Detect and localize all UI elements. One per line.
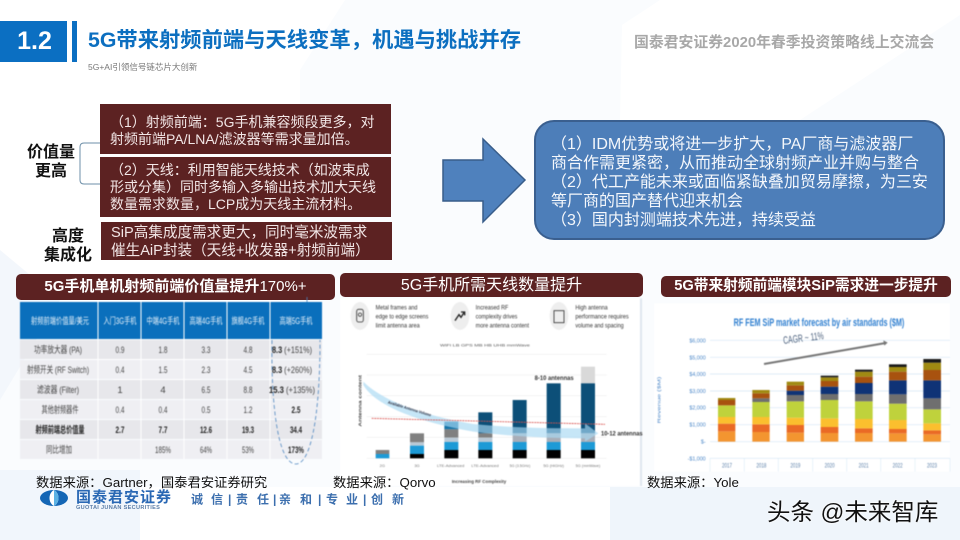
text box: RF front end: 射频前端PA/LNA/滤波器等需求量加倍。 — [110, 131, 359, 147]
SiP chart: 2017 — [722, 463, 732, 470]
table heading — [16, 274, 335, 300]
SiP chart: $6,000 — [689, 338, 706, 344]
text box: SiP: SiP高集成度需求更大，同时毫米波需求 — [111, 225, 367, 241]
antenna chart: more antenna content — [476, 323, 529, 330]
antenna chart: limit antenna area — [376, 323, 420, 330]
value table: 滤波器 (Filter) — [37, 384, 79, 396]
text box: antenna: 形或分集）同时多输入多输出技术加大天线 — [110, 179, 376, 195]
value table: 高端5G手机 — [280, 315, 312, 326]
value table: 8.3 (+151%) — [272, 345, 312, 356]
value table: 34.4 — [290, 425, 302, 436]
text box: RF front end: （1）射频前端：5G手机兼容频段更多，对 — [110, 114, 374, 130]
label: high integration: 高度 — [52, 228, 84, 245]
antenna chart: edge to edge screens — [376, 314, 428, 321]
value table: 4.5 — [244, 365, 252, 376]
label: high integration — [44, 227, 92, 264]
SiP chart: 2018 — [756, 463, 767, 470]
SiP chart: $3,000 — [689, 389, 706, 395]
antenna chart: Increasing RF Complexity — [452, 479, 507, 484]
value table: 4 — [160, 385, 166, 396]
label: value up — [27, 143, 75, 180]
SiP chart: Revenue ($M) — [656, 376, 661, 423]
value table: 0.5 — [202, 405, 210, 416]
value table: 173% — [288, 445, 304, 456]
SiP chart: 2022 — [893, 463, 903, 470]
slogan: 诚信|责任|亲和|专业|创新 — [191, 492, 404, 506]
value table: 2.7 — [116, 425, 124, 436]
conclusion box: 等厂商的国产替代迎来机会 — [551, 193, 743, 210]
watermark: 头条 @未来智库 — [767, 499, 938, 525]
value table: 射频开关 (RF Switch) — [27, 364, 89, 376]
conclusion box — [534, 120, 945, 240]
title: 5G带来射频前端与天线变革，机遇与挑战并存 — [88, 28, 521, 52]
subtitle: 5G+AI引领信号链芯片大创新 — [88, 62, 197, 72]
antenna chart: 10-12 antennas — [601, 430, 643, 437]
value table: 19.3 — [242, 425, 254, 436]
text box: RF front end — [100, 104, 391, 154]
SiP chart: 2021 — [859, 463, 869, 470]
antenna chart: LTE-Advanced — [437, 463, 464, 468]
SiP chart heading: 5G带来射频前端模块SiP需求进一步提升 — [674, 278, 938, 294]
antenna chart: High antenna — [575, 305, 608, 312]
value table: 0.4 — [158, 405, 168, 416]
value table: 53% — [242, 445, 254, 456]
source: Gartner: 数据来源：Gartner，国泰君安证券研究 — [36, 475, 267, 490]
antenna chart: 5G (HiGHz) — [543, 463, 565, 468]
table heading: 5G手机单机射频前端价值量提升170%+ — [44, 278, 307, 295]
antenna chart: 5G (3.5GHz) — [510, 463, 531, 468]
conclusion box: （2）代工产能未来或面临紧缺叠加贸易摩擦，为三安 — [551, 174, 928, 191]
antenna chart: 5G (mmWave) — [576, 463, 601, 468]
value table: 6.5 — [202, 385, 210, 396]
value table: 2.5 — [292, 405, 301, 416]
value table: 0.9 — [116, 345, 124, 356]
value table: 1 — [117, 385, 123, 396]
conclusion box: 商合作需更紧密，从而推动全球射频产业并购与整合 — [551, 155, 919, 172]
text box: SiP — [101, 222, 392, 260]
logo english name: GUOTAI JUNAN SECURITIES — [76, 504, 160, 510]
label: value up: 价值量 — [27, 144, 75, 161]
conclusion box: （3）国内封测端技术先进，持续受益 — [551, 212, 816, 229]
SiP chart: 2020 — [825, 463, 835, 470]
antenna chart heading — [340, 273, 643, 297]
header accent bar — [72, 21, 77, 62]
section number badge: 1.2 — [17, 27, 52, 55]
SiP chart: 2023 — [927, 463, 937, 470]
value table: 0.4 — [116, 405, 124, 416]
value table: 同比增加 — [46, 444, 72, 456]
antenna chart: 8-10 antennas — [535, 375, 574, 382]
SiP chart: -$1,000 — [688, 456, 706, 462]
value table: 入门3G手机 — [104, 315, 136, 326]
antenna chart: LTE-Advanced — [471, 463, 499, 468]
value table: 0.4 — [116, 365, 124, 376]
source: Yole: 数据来源：Yole — [647, 475, 739, 490]
antenna chart: 2G — [380, 463, 385, 468]
value table: 15.3 (+135%) — [269, 385, 315, 396]
value table: 8.3 (+260%) — [272, 365, 312, 376]
value table: 旗舰4G手机 — [232, 315, 264, 326]
company logo — [40, 489, 172, 510]
value table: 64% — [200, 445, 212, 456]
value table: 功率放大器 (PA) — [34, 344, 82, 356]
SiP chart: $5,000 — [689, 355, 706, 361]
label: high integration: 集成化 — [44, 247, 92, 264]
value table: 185% — [155, 445, 171, 456]
value table: 高端4G手机 — [190, 315, 222, 326]
antenna chart: volume and spacing — [575, 323, 624, 330]
value table: 1.8 — [158, 345, 168, 356]
SiP chart: $- — [701, 440, 706, 446]
text box: antenna: （2）天线：利用智能天线技术（如波束成 — [110, 162, 370, 178]
antenna chart: Increased RF — [476, 305, 508, 312]
value table: 1.5 — [158, 365, 168, 376]
text box: antenna: 数量需求数量，LCP成为天线主流材料。 — [110, 196, 361, 212]
SiP chart heading — [661, 276, 951, 297]
value table: 射频前端总价值量 — [36, 424, 85, 436]
antenna chart: WiFi LB GPS MB HB UHB mmWave — [440, 342, 531, 347]
value table: 射频前端价值量/美元 — [31, 315, 89, 326]
antenna chart: 3G — [414, 463, 420, 468]
SiP chart: 2019 — [790, 463, 801, 470]
event name: 国泰君安证券2020年春季投资策略线上交流会 — [634, 35, 934, 51]
SiP chart: $1,000 — [689, 423, 706, 429]
text box: SiP: 催生AiP封装（天线+收发器+射频前端） — [111, 243, 370, 259]
source: Qorvo: 数据来源：Qorvo — [333, 475, 436, 490]
antenna chart: Metal frames and — [376, 305, 418, 312]
value table: 中端4G手机 — [146, 315, 180, 326]
text box: antenna — [100, 157, 391, 217]
value table: 4.8 — [244, 345, 252, 356]
section number badge — [0, 21, 67, 62]
value table: 2.3 — [202, 365, 210, 376]
logo name: 国泰君安证券 — [76, 489, 172, 506]
value table: 8.8 — [244, 385, 252, 396]
value table: 1.2 — [244, 405, 252, 416]
value table: 3.3 — [202, 345, 210, 356]
value table: 12.6 — [200, 425, 212, 436]
SiP chart: CAGR ~ 11% — [783, 330, 825, 347]
value table: 7.7 — [158, 425, 168, 436]
label: value up: 更高 — [35, 163, 67, 180]
antenna chart: Available Antenna Volume — [387, 400, 433, 418]
SiP chart: $2,000 — [689, 406, 706, 412]
SiP chart: $4,000 — [689, 372, 706, 378]
antenna chart: complexity drives — [476, 314, 517, 321]
antenna chart heading: 5G手机所需天线数量提升 — [401, 277, 582, 294]
antenna chart: Antenna content — [358, 375, 364, 427]
icon: logo mark — [40, 490, 68, 506]
conclusion box: （1）IDM优势或将进一步扩大，PA厂商与滤波器厂 — [551, 136, 913, 153]
antenna chart: performance requires — [575, 314, 629, 321]
value table: 其他射频器件 — [42, 404, 79, 416]
